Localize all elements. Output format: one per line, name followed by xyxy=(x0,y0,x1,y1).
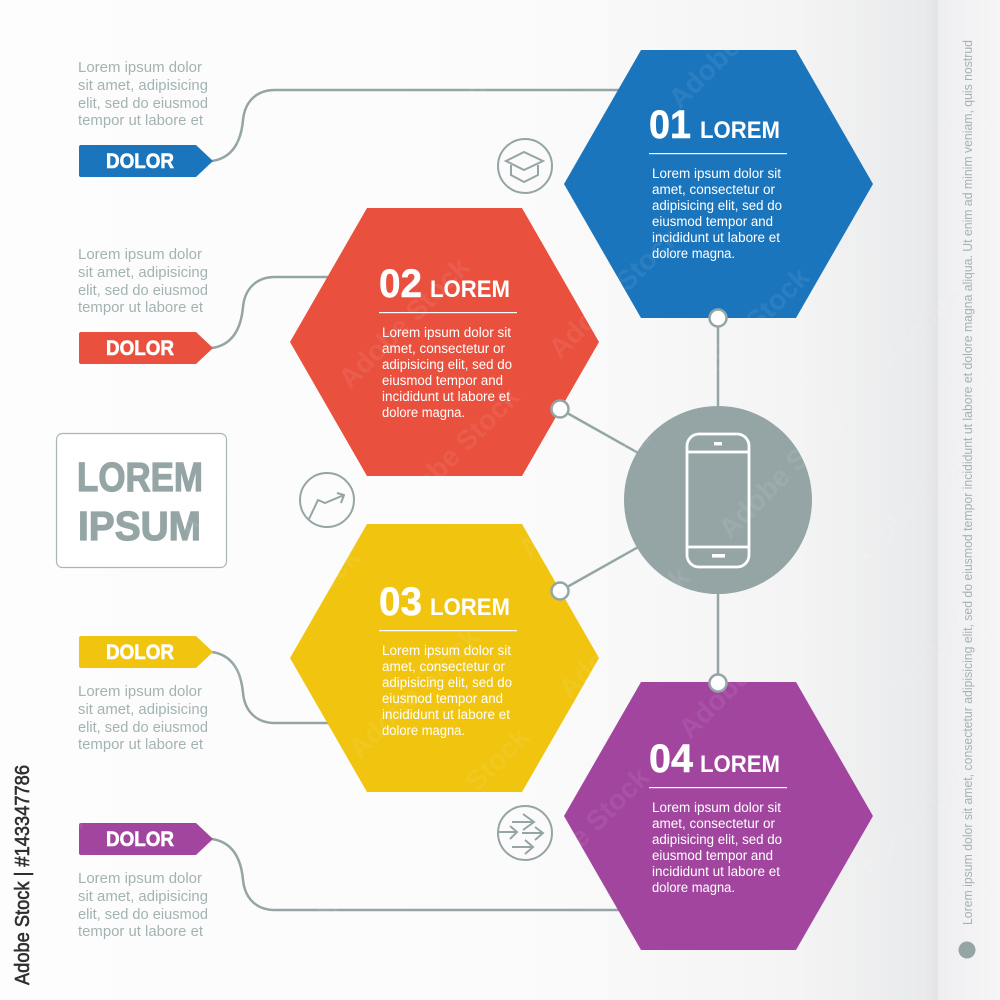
tag: red DOLOR xyxy=(79,332,213,364)
vertical side text: Lorem ipsum dolor sit amet, consectetur adipisicing elit, sed do eiusmod tempor incididunt ut labore et dolore magna aliqua. Ut enim ad minim veniam, quis nostrud xyxy=(961,40,975,925)
text block: yellow xyxy=(78,683,208,753)
title box xyxy=(56,434,226,568)
tag: yellow DOLOR: DOLOR xyxy=(106,641,174,664)
connector: purple tag to hexagon 04 xyxy=(212,839,620,910)
node: bottom xyxy=(710,674,726,692)
watermark: Adobe Stock xyxy=(242,851,386,994)
side dot xyxy=(958,942,976,958)
text block: yellow: tempor ut labore et xyxy=(78,736,204,753)
body text 01: amet, consectetur or xyxy=(652,182,775,197)
panel: hexagon 03 yellow xyxy=(290,524,599,792)
tag: purple DOLOR: DOLOR xyxy=(106,828,174,851)
watermark: Adobe Stock xyxy=(372,51,516,194)
text block: blue: elit, sed do eiusmod xyxy=(78,95,208,112)
text block: blue: Lorem ipsum dolor xyxy=(78,59,202,76)
icon: growth chart arrow xyxy=(300,473,354,527)
tag: blue DOLOR xyxy=(79,145,213,177)
body text 02: amet, consectetur or xyxy=(382,341,505,356)
body text 04: amet, consectetur or xyxy=(652,816,775,831)
watermark: Adobe Stock xyxy=(512,421,656,564)
tag: purple DOLOR xyxy=(79,823,213,855)
body text 01: dolore magna. xyxy=(652,246,735,261)
panel: hexagon 04 purple xyxy=(564,682,873,950)
text block: red xyxy=(78,246,208,316)
body text 03: eiusmod tempor and xyxy=(382,691,503,706)
tag: blue DOLOR: DOLOR xyxy=(106,150,174,173)
heading 02: LOREM xyxy=(430,276,510,303)
body text 02 xyxy=(382,325,512,420)
panel: hexagon 02 red xyxy=(290,208,599,476)
body text 02: Lorem ipsum dolor sit xyxy=(382,325,511,340)
number 04: 04 xyxy=(649,737,694,781)
title box: IPSUM xyxy=(78,503,201,549)
node: red hexagon xyxy=(552,400,568,418)
node: yellow hexagon xyxy=(552,582,568,600)
node: top xyxy=(710,310,726,326)
stock credit text: Adobe Stock | #143347786 xyxy=(12,765,34,985)
body text 04: dolore magna. xyxy=(652,880,735,895)
text block: purple: sit amet, adipisicing xyxy=(78,888,208,905)
watermark: Adobe Stock xyxy=(162,86,306,229)
right side strip xyxy=(938,0,1000,1000)
connector: red tag to hexagon 02 xyxy=(212,277,330,348)
watermark: Adobe Stock xyxy=(332,251,476,394)
body text 04 xyxy=(652,800,782,895)
watermark: Adobe Stock xyxy=(672,261,816,404)
body text 01: incididunt ut labore et xyxy=(652,230,780,245)
body text 03: amet, consectetur or xyxy=(382,659,505,674)
icon: merging arrows xyxy=(498,806,552,860)
body text 03: incididunt ut labore et xyxy=(382,707,510,722)
watermark: Adobe Stock xyxy=(172,401,316,544)
body text 02: adipisicing elit, sed do xyxy=(382,357,512,372)
body text 01 xyxy=(652,166,782,261)
body text 03: Lorem ipsum dolor sit xyxy=(382,643,511,658)
text block: purple: Lorem ipsum dolor xyxy=(78,870,202,887)
body text 02: dolore magna. xyxy=(382,405,465,420)
text block: purple xyxy=(78,870,208,940)
body text 04: incididunt ut labore et xyxy=(652,864,780,879)
text block: red: tempor ut labore et xyxy=(78,299,204,316)
watermark: Adobe Stock xyxy=(542,221,686,364)
tag: yellow DOLOR xyxy=(79,636,213,668)
panel: hexagon 01 blue xyxy=(564,50,873,318)
watermark: Adobe Stock xyxy=(512,761,656,904)
watermark: Adobe Stock xyxy=(672,601,816,744)
body text 03: dolore magna. xyxy=(382,723,465,738)
watermark: Adobe Stock xyxy=(842,431,986,574)
text block: yellow: sit amet, adipisicing xyxy=(78,701,208,718)
number 02: 02 xyxy=(379,262,422,306)
text block: purple: elit, sed do eiusmod xyxy=(78,906,208,923)
watermark: Adobe Stock xyxy=(62,691,206,834)
text block: blue: sit amet, adipisicing xyxy=(78,77,208,94)
body text 02: eiusmod tempor and xyxy=(382,373,503,388)
heading 01: LOREM xyxy=(700,117,780,144)
heading 03: LOREM xyxy=(430,594,510,621)
body text 04: Lorem ipsum dolor sit xyxy=(652,800,781,815)
number 03: 03 xyxy=(379,580,422,624)
icon: graduation cap xyxy=(498,139,552,193)
watermark: Adobe Stock xyxy=(852,741,996,884)
body text 03: adipisicing elit, sed do xyxy=(382,675,512,690)
body text 03 xyxy=(382,643,512,738)
number 01: 01 xyxy=(649,103,691,147)
body text 02: incididunt ut labore et xyxy=(382,389,510,404)
body text 01: Lorem ipsum dolor sit xyxy=(652,166,781,181)
heading 04: LOREM xyxy=(700,751,780,778)
text block: yellow: elit, sed do eiusmod xyxy=(78,719,208,736)
central circle with phone icon xyxy=(624,406,812,594)
watermark: Adobe Stock xyxy=(392,721,536,864)
text block: red: Lorem ipsum dolor xyxy=(78,246,202,263)
text block: red: sit amet, adipisicing xyxy=(78,264,208,281)
watermark: Adobe Stock xyxy=(382,381,526,524)
watermark: Adobe Stock xyxy=(712,401,856,544)
connector lines from phone circle to nodes xyxy=(560,318,718,683)
connector: blue tag to hexagon 01 xyxy=(212,90,625,161)
text block: blue: tempor ut labore et xyxy=(78,112,204,129)
tag: red DOLOR: DOLOR xyxy=(106,337,174,360)
watermark: Adobe Stock xyxy=(552,561,696,704)
body text 01: adipisicing elit, sed do xyxy=(652,198,782,213)
text block: blue xyxy=(78,59,208,129)
watermark: Adobe Stock xyxy=(222,541,366,684)
title box: LOREM xyxy=(77,454,203,500)
text block: purple: tempor ut labore et xyxy=(78,923,204,940)
watermark: Adobe Stock xyxy=(342,621,486,764)
text block: red: elit, sed do eiusmod xyxy=(78,282,208,299)
body text 04: eiusmod tempor and xyxy=(652,848,773,863)
connector: yellow tag to hexagon 03 xyxy=(212,652,330,723)
body text 04: adipisicing elit, sed do xyxy=(652,832,782,847)
text block: yellow: Lorem ipsum dolor xyxy=(78,683,202,700)
body text 01: eiusmod tempor and xyxy=(652,214,773,229)
